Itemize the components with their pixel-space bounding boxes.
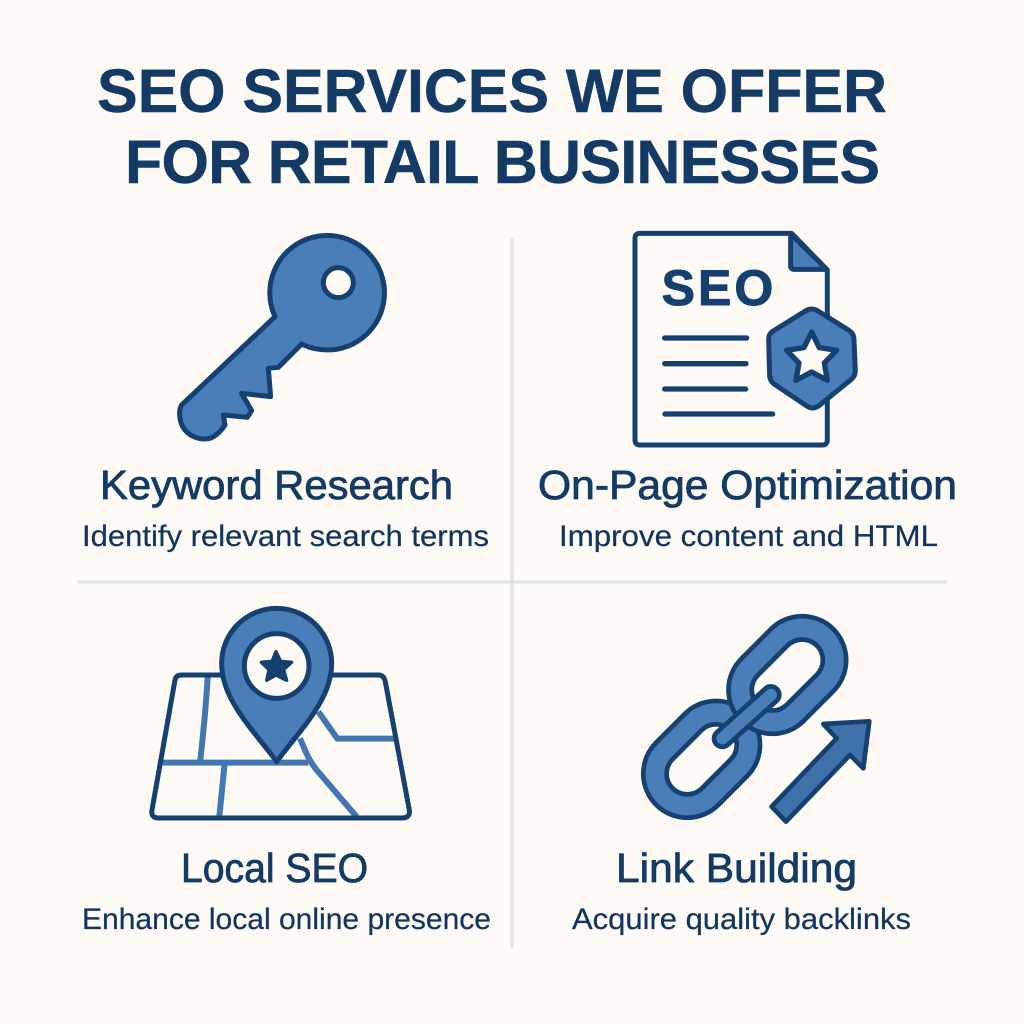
icon: chain link with arrow — [625, 598, 869, 836]
title: SEO SERVICES WE OFFER — [97, 57, 887, 125]
title: FOR RETAIL BUSINESSES — [125, 128, 880, 196]
icon: key — [180, 235, 384, 439]
heading: link building: Link Building — [616, 845, 857, 891]
description: keyword research: Identify relevant search terms — [82, 520, 489, 553]
description: link building: Acquire quality backlinks — [572, 903, 911, 936]
title — [97, 57, 887, 196]
heading: keyword research: Keyword Research — [100, 462, 453, 508]
heading: on-page optimization: On-Page Optimization — [538, 462, 957, 508]
panel: on-page optimization — [538, 233, 957, 553]
description: on-page optimization: Improve content and HTML — [559, 520, 938, 553]
icon: map with location pin — [152, 608, 409, 818]
icon: SEO document with star badge — [635, 233, 855, 445]
panel: local seo — [82, 608, 491, 936]
heading: local seo: Local SEO — [181, 845, 368, 891]
panel: keyword research — [82, 235, 489, 553]
panel: link building — [572, 598, 911, 936]
description: local seo: Enhance local online presence — [82, 903, 491, 936]
icon: SEO document with star badge: SEO — [662, 260, 773, 316]
